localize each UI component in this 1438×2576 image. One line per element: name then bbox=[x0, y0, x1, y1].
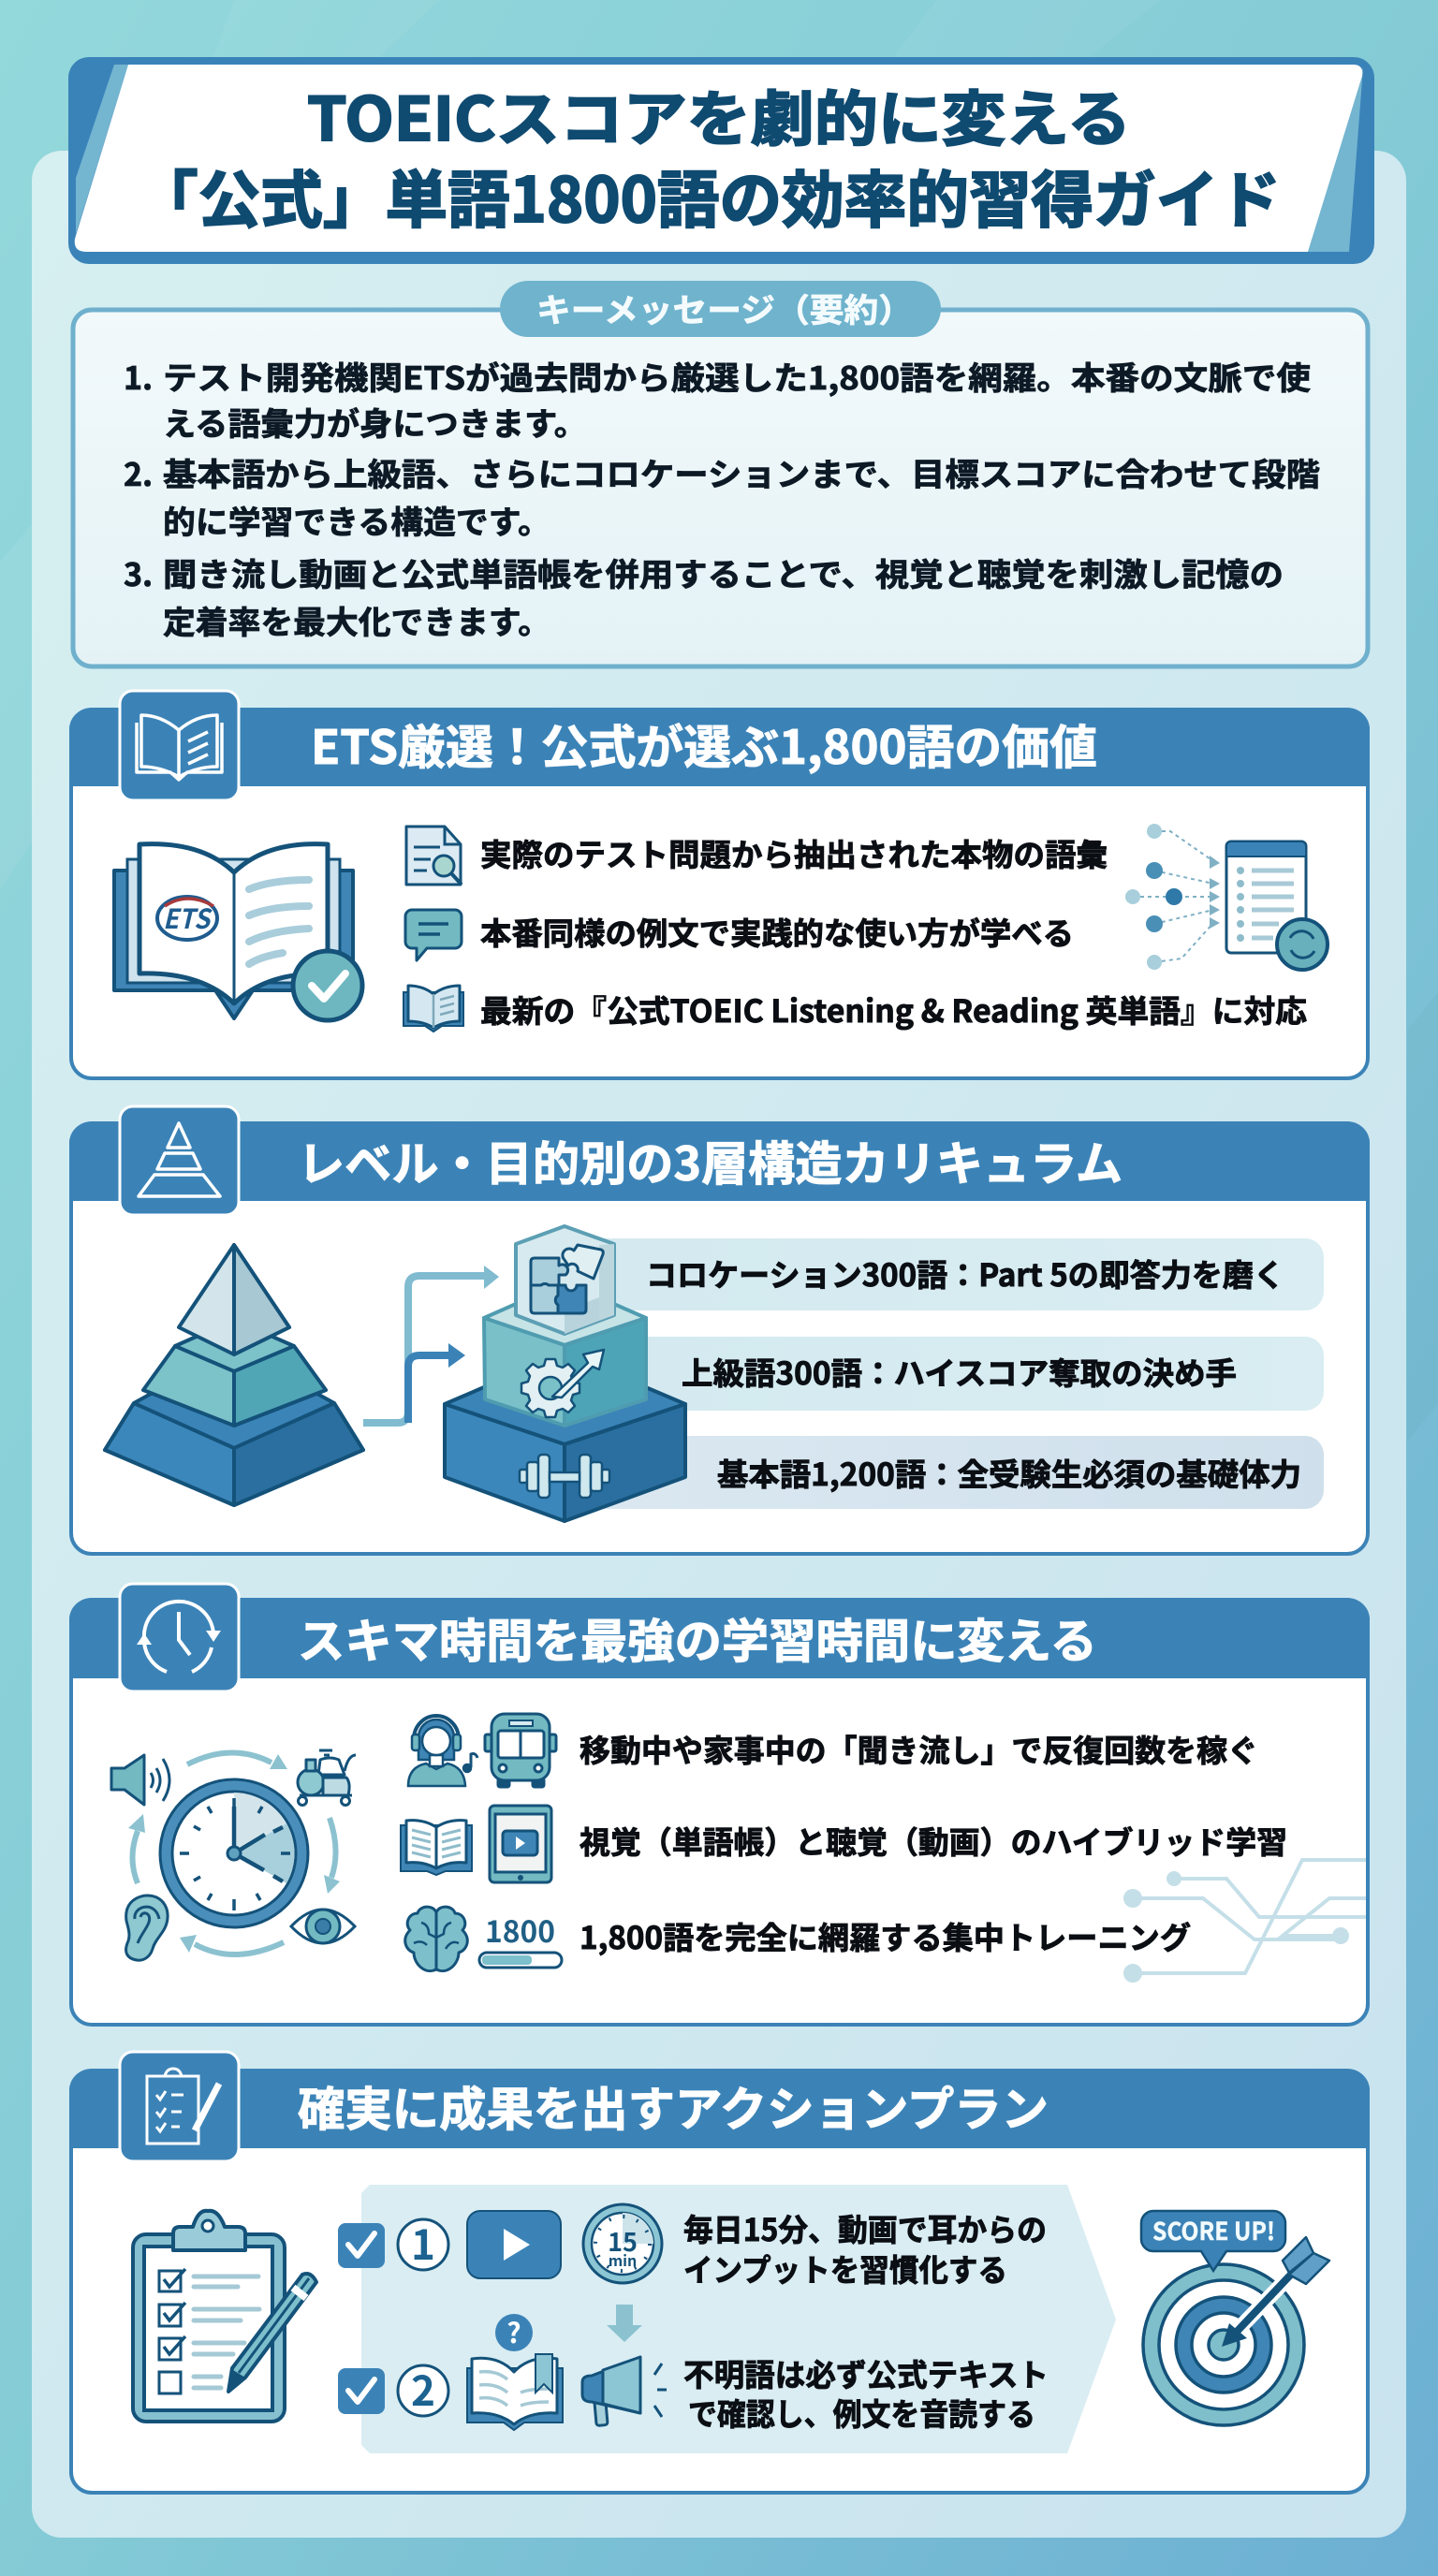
chart: pyramid bbox=[105, 1245, 363, 1505]
icon: brain bbox=[405, 1907, 467, 1971]
icon: dumbbell bbox=[520, 1455, 609, 1498]
icon: 15 min timer: min bbox=[609, 2248, 637, 2271]
step 2 text bbox=[683, 2350, 1049, 2435]
bullet 2 text: 視覚（単語帳）と聴覚（動画）のハイブリッド学習 bbox=[580, 1818, 1287, 1863]
decorative circuit lines icon bbox=[1125, 1860, 1366, 1981]
icon: tablet video bbox=[490, 1806, 551, 1882]
icon: open book with ETS logo and check bbox=[114, 844, 362, 1020]
icon: 1800 progress bbox=[479, 1909, 562, 1968]
key message list: テスト開発機関ETSが過去問から厳選した1,800語を網羅。本番の文脈で使 bbox=[163, 353, 1311, 399]
icon: clock with senses bbox=[111, 1750, 356, 1960]
callout: score up: SCORE UP! bbox=[1152, 2213, 1275, 2247]
key message list: 1. bbox=[124, 353, 153, 399]
heading tab icon: pyramid bbox=[120, 1106, 239, 1215]
title banner bbox=[68, 57, 1374, 264]
title line 2: 「公式」単語1800語の効率的習得ガイド bbox=[136, 151, 1281, 241]
key message list: 的に学習できる構造です。 bbox=[163, 497, 550, 543]
step 2 check bbox=[338, 2368, 385, 2414]
icon: question mark: ? bbox=[506, 2310, 521, 2351]
key message pill bbox=[500, 281, 941, 337]
label bar 2: 上級語300語：ハイスコア奪取の決め手 bbox=[682, 1349, 1237, 1394]
key message list: 3. bbox=[124, 549, 153, 595]
step 1 text: 毎日15分、動画で耳からの bbox=[683, 2205, 1047, 2250]
icon: question mark bbox=[495, 2310, 533, 2351]
icon: ear bbox=[126, 1895, 168, 1960]
step 1 text bbox=[683, 2205, 1047, 2291]
stack base: basic words bbox=[445, 1353, 685, 1521]
step 1 number bbox=[398, 2212, 448, 2272]
bullet 2 text: 本番同様の例文で実践的な使い方が学べる bbox=[480, 909, 1074, 954]
key message pill: キーメッセージ（要約） bbox=[536, 285, 913, 332]
key message list: 聞き流し動画と公式単語帳を併用することで、視覚と聴覚を刺激し記憶の bbox=[163, 549, 1284, 595]
bullet 3 icon: book bbox=[404, 986, 463, 1032]
step 2 number bbox=[398, 2358, 448, 2418]
heading tab icon: checklist bbox=[120, 2052, 239, 2161]
icon: speaker bbox=[111, 1755, 169, 1805]
panel: spare time bbox=[69, 1584, 1370, 2025]
chart: stacked levels bbox=[445, 1226, 685, 1521]
key message list bbox=[124, 353, 1320, 643]
icon: puzzle bbox=[531, 1245, 603, 1313]
ETS logo: ETS bbox=[163, 898, 213, 937]
label bar 3 bbox=[562, 1436, 1324, 1509]
icon: wordbook bbox=[401, 1821, 472, 1875]
bullet 2 icon: speech bubble bbox=[405, 910, 462, 960]
heading tab icon: clock bbox=[120, 1584, 239, 1691]
icon: eye bbox=[291, 1910, 355, 1943]
bullet 1 icon: document search bbox=[406, 827, 462, 885]
arrow panel bbox=[361, 2185, 1116, 2453]
step 1 text: インプットを習慣化する bbox=[683, 2246, 1007, 2291]
panel: key message bbox=[73, 281, 1368, 666]
key message list: 2. bbox=[124, 449, 153, 495]
label bar 3: 基本語1,200語：全受験生必須の基礎体力 bbox=[717, 1450, 1301, 1495]
step 1 check bbox=[338, 2223, 385, 2268]
icon: 1800 progress: 1800 bbox=[485, 1909, 555, 1952]
icon: textbook bbox=[467, 2354, 563, 2430]
panel: ETS value bbox=[69, 691, 1370, 1078]
key message list: える語彙力が身につきます。 bbox=[163, 399, 587, 445]
bullet 1 text: 移動中や家事中の「聞き流し」で反復回数を稼ぐ bbox=[580, 1726, 1258, 1771]
icon: cleaning cart bbox=[298, 1750, 356, 1805]
clock bbox=[160, 1779, 308, 1927]
icon: gear and arrow bbox=[521, 1350, 604, 1417]
key message list: 基本語から上級語、さらにコロケーションまで、目標スコアに合わせて段階 bbox=[163, 449, 1320, 495]
heading: スキマ時間を最強の学習時間に変える bbox=[298, 1604, 1097, 1672]
callout: score up bbox=[1141, 2211, 1285, 2271]
bullet 3 text: 最新の『公式TOEIC Listening & Reading 英単語』に対応 bbox=[480, 987, 1307, 1032]
icon: play button bbox=[467, 2211, 561, 2278]
label bar 2 bbox=[562, 1337, 1324, 1411]
heading: ETS厳選！公式が選ぶ1,800語の価値 bbox=[311, 710, 1097, 778]
arrow: pyramid to stack bbox=[363, 1266, 499, 1423]
step 1 number: 1 bbox=[411, 2212, 435, 2272]
panel: 3 layer curriculum bbox=[69, 1106, 1370, 1554]
bullet 3 text: 1,800語を完全に網羅する集中トレーニング bbox=[580, 1913, 1191, 1958]
heading: レベル・目的別の3層構造カリキュラム bbox=[298, 1127, 1123, 1194]
panel: action plan bbox=[69, 2052, 1370, 2493]
stack middle: advanced words bbox=[484, 1282, 646, 1426]
cycle arrows bbox=[128, 1752, 340, 1954]
icon: words filtered into list bbox=[1125, 824, 1328, 970]
icon: bus bbox=[485, 1714, 556, 1787]
step 2 number: 2 bbox=[411, 2358, 435, 2418]
icon: listener bbox=[408, 1716, 477, 1786]
stack top: collocations bbox=[516, 1226, 614, 1334]
icon: 15 min timer: 15 bbox=[608, 2222, 638, 2259]
arrow: step 1 to 2 bbox=[607, 2305, 642, 2342]
icon: megaphone bbox=[582, 2357, 667, 2425]
label bar 1 bbox=[562, 1238, 1324, 1310]
key message list: 定着率を最大化できます。 bbox=[163, 597, 550, 643]
label bar 1: コロケーション300語：Part 5の即答力を磨く bbox=[646, 1251, 1284, 1295]
title line 1: TOEICスコアを劇的に変える bbox=[307, 72, 1131, 158]
icon: target with arrow bbox=[1143, 2237, 1329, 2425]
icon: 15 min timer bbox=[583, 2204, 662, 2283]
bullet 1 text: 実際のテスト問題から抽出された本物の語彙 bbox=[480, 830, 1108, 875]
step 2 text: で確認し、例文を音読する bbox=[688, 2390, 1035, 2435]
step 2 text: 不明語は必ず公式テキスト bbox=[683, 2350, 1049, 2395]
icon: clipboard with pencil bbox=[133, 2211, 316, 2422]
heading tab icon: book bbox=[120, 691, 239, 800]
heading: 確実に成果を出すアクションプラン bbox=[298, 2072, 1049, 2140]
check badge bbox=[293, 951, 362, 1020]
